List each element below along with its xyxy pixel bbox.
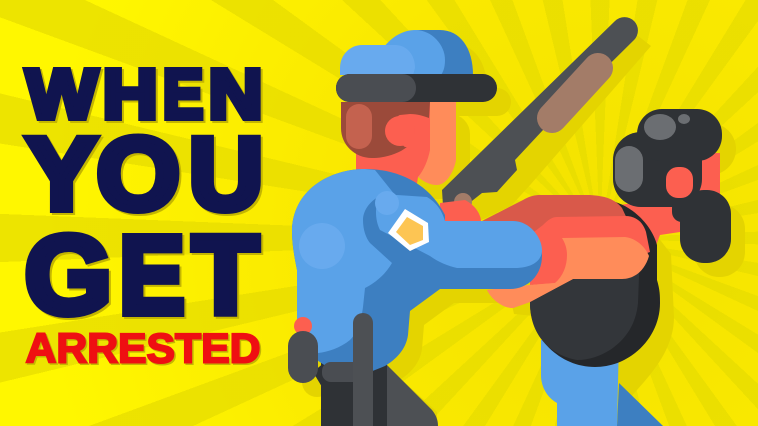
officer's hair xyxy=(341,102,430,158)
baton raised by police officer xyxy=(442,17,638,211)
heading line: WHEN: N xyxy=(210,57,264,135)
icon: police badge xyxy=(388,209,429,251)
heading line: YOU: U xyxy=(189,117,263,231)
heading line: WHEN: W xyxy=(26,55,97,133)
heading line: GET: E xyxy=(121,216,187,339)
officer's hand on baton xyxy=(440,200,481,226)
woman's dark torso xyxy=(530,200,660,367)
woman's ear xyxy=(666,167,693,198)
police officer xyxy=(288,30,542,426)
heading line: GET: E xyxy=(119,214,185,337)
heading line: YOU xyxy=(27,117,265,233)
officer's cap xyxy=(336,30,497,102)
heading line: YOU: O xyxy=(99,119,182,233)
heading line: WHEN: E xyxy=(165,57,205,135)
heading line: GET: G xyxy=(25,214,112,337)
heading line: YOU: Y xyxy=(27,117,96,231)
heading line: WHEN: E xyxy=(163,55,203,133)
woman's bent arms xyxy=(482,195,650,308)
officer's legs xyxy=(313,362,438,426)
officer's duty belt, wrist and holster xyxy=(288,313,373,426)
woman's hair xyxy=(613,109,731,263)
heading line: WHEN: H xyxy=(103,55,158,133)
heading line: GET: T xyxy=(192,214,258,337)
woman's leg xyxy=(541,340,663,426)
heading line: WHEN: N xyxy=(208,55,262,133)
heading line: ARRESTED: ARRESTED xyxy=(26,324,260,372)
woman's neck xyxy=(620,153,720,248)
title: WHEN YOU GET ARRESTED xyxy=(25,55,265,373)
heading line: YOU: O xyxy=(97,117,180,231)
officer's neck xyxy=(356,100,456,190)
heading line: YOU: Y xyxy=(29,119,98,233)
heading line: WHEN: W xyxy=(28,57,99,135)
heading line: GET: G xyxy=(27,216,114,339)
heading line: GET: T xyxy=(194,216,260,339)
heading line: WHEN: H xyxy=(105,57,160,135)
heading line: GET xyxy=(25,214,260,339)
figures' long drop shadow xyxy=(302,32,745,426)
detained person xyxy=(482,109,731,426)
heading line: YOU: U xyxy=(191,119,265,233)
officer's uniform torso and arm xyxy=(292,169,542,372)
heading line: WHEN xyxy=(26,55,264,135)
heading line: ARRESTED: ARRESTED xyxy=(27,326,262,373)
